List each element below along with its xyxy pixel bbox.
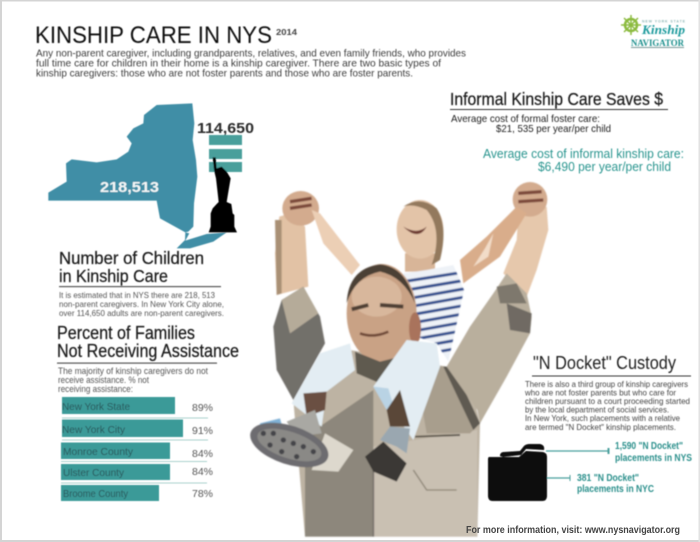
bar: New York City: [62, 420, 213, 437]
description: [58, 366, 208, 395]
description: It is estimated that in NYS there are 218, 513: [59, 290, 215, 300]
child's shorts: [292, 343, 355, 427]
child's arms: [312, 210, 360, 275]
bar: Ulster County: [61, 464, 213, 480]
description: receiving assistance:: [58, 384, 133, 395]
description: are termed "N Docket" kinship placements.: [525, 422, 676, 432]
map value: 218,513: [100, 179, 159, 196]
icon: ship wheel: [621, 15, 641, 35]
logo: Kinship Navigator: NEW YORK STATE: [642, 20, 686, 24]
heading: [57, 323, 239, 361]
bar: New York City: New York City: [62, 424, 126, 436]
year: 2014: [276, 27, 297, 37]
informal kinship care cost: [483, 146, 684, 174]
bar: Ulster County: Ulster County: [63, 467, 125, 479]
description: non-parent caregivers. In New York City alone,: [59, 299, 224, 309]
panel: N Docket custody: [488, 353, 692, 501]
description: In New York, such placements with a relative: [525, 413, 680, 423]
logo: Kinship Navigator: [621, 15, 686, 49]
bar chart: [61, 397, 213, 501]
panel: informal kinship care saves: [450, 89, 684, 174]
bar: New York State: 89%: [192, 402, 213, 414]
child's legs and shoes: [303, 392, 327, 417]
heading: "N Docket" Custody: [533, 353, 676, 373]
heading: Percent of Families: [57, 323, 195, 343]
formal foster care cost: [451, 113, 611, 135]
arrow: NYS placements: [546, 448, 608, 454]
description: The majority of kinship caregivers do not: [58, 366, 208, 377]
man's torso: [293, 350, 480, 537]
description: receive assistance. % not: [58, 375, 149, 386]
stat: New York City 114,650: 114,650: [197, 120, 254, 137]
map: New York State: [48, 103, 227, 248]
bar: Broome County: [61, 485, 213, 501]
description: who are not foster parents but who care for: [524, 388, 676, 398]
description: by the local department of social services.: [525, 404, 669, 414]
icon: folder: [488, 444, 547, 501]
heading: Informal Kinship Care Saves $: [450, 89, 663, 109]
arrow: NYC placements: [547, 475, 570, 481]
bar: Monroe County: [61, 442, 213, 460]
description: [59, 290, 224, 318]
bar: New York State: [62, 397, 213, 414]
heading: Number of Children: [59, 248, 204, 268]
hands: [282, 191, 319, 226]
child's striped shirt: [404, 266, 465, 360]
bar: Monroe County: Monroe County: [63, 446, 134, 458]
man's raised left arm: [275, 213, 308, 295]
callout: NYS placements: 1,590 "N Docket": [615, 440, 683, 452]
title: KINSHIP CARE IN NYS: [35, 22, 272, 49]
stat: New York City 114,650: [197, 120, 254, 232]
heading: Not Receiving Assistance: [57, 341, 239, 361]
man's head: [347, 264, 417, 363]
logo: Kinship Navigator: NAVIGATOR: [631, 39, 684, 49]
bar: Broome County: Broome County: [63, 488, 129, 500]
informal kinship care cost: $6,490 per year/per child: [538, 159, 671, 174]
man's raised right arm: [503, 207, 548, 297]
intro text: kinship caregivers: those who are not foster parents and those who are foster parents.: [36, 68, 413, 80]
description: children pursuant to a court proceeding started: [525, 396, 690, 406]
bar: New York City: 91%: [192, 425, 213, 437]
bar: Monroe County: 84%: [192, 448, 213, 460]
formal foster care cost: $21, 535 per year/per child: [496, 123, 611, 135]
bar: Broome County: 78%: [192, 488, 213, 500]
heading: in Kinship Care: [59, 266, 168, 286]
callout: NYC placements: placements in NYC: [577, 483, 654, 495]
informal kinship care cost: Average cost of informal kinship care:: [483, 146, 684, 161]
photo: man carrying child on shoulders: [245, 182, 548, 537]
panel: number of children in kinship care: [59, 248, 224, 318]
intro text: [36, 48, 466, 80]
bar: New York State: New York State: [62, 401, 130, 413]
intro text: full time care for children in their home is a kinship caregiver. There are two basic types of: [36, 58, 441, 70]
callout: NYS placements: [615, 440, 692, 464]
callout: NYC placements: [577, 472, 654, 495]
description: There is also a third group of kinship caregivers: [525, 379, 688, 389]
panel: percent of families not receiving assistance: [57, 323, 239, 501]
description: [524, 379, 690, 432]
child's head: [405, 253, 435, 272]
intro text: Any non-parent caregiver, including grandparents, relatives, and even family friends, who provides: [36, 48, 466, 60]
bar: Ulster County: 84%: [192, 466, 213, 478]
description: over 114,650 adults are non-parent caregivers.: [59, 308, 224, 318]
logo: Kinship Navigator: Kinship: [641, 22, 686, 37]
heading: [59, 248, 204, 286]
formal foster care cost: Average cost of formal foster care:: [451, 113, 600, 125]
icon: Statue of Liberty: [209, 157, 237, 232]
callout: NYC placements: 381 "N Docket": [577, 472, 639, 484]
